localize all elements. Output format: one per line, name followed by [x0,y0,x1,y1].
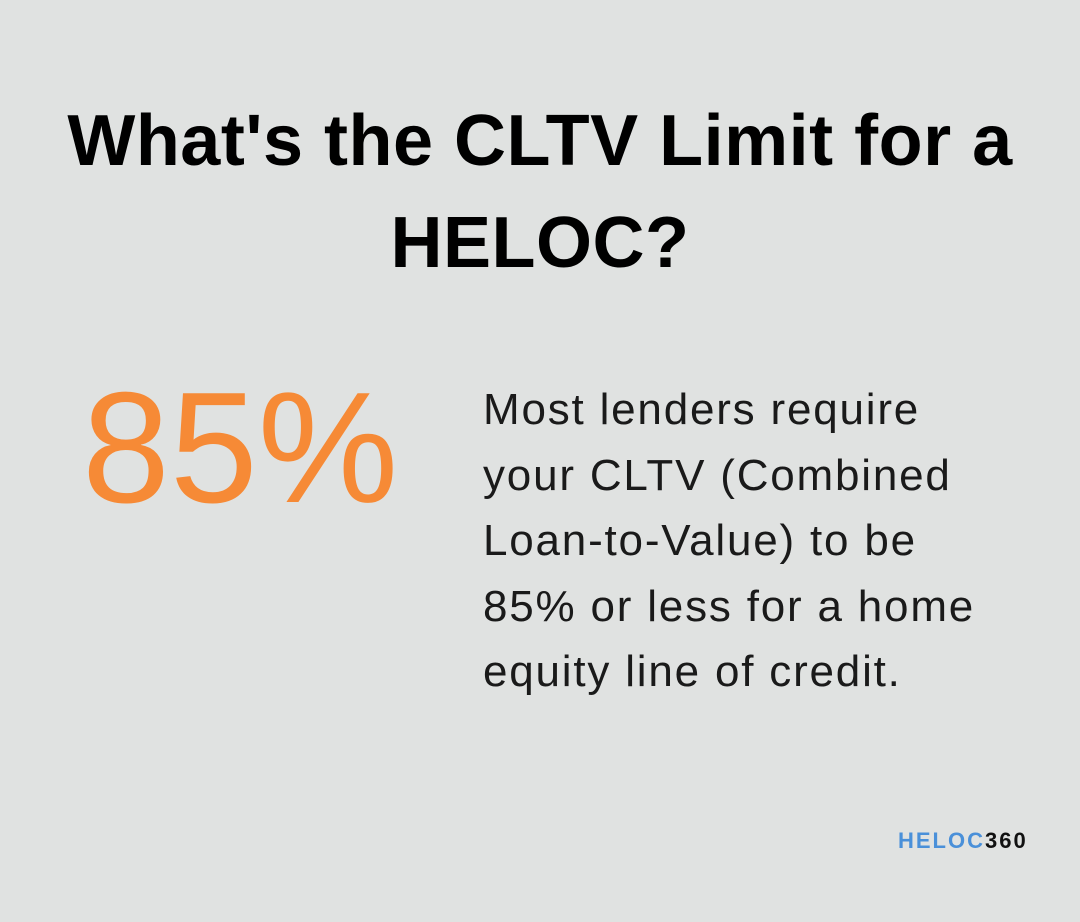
description text: 85% or less for a home [483,582,975,630]
title: What's the CLTV Limit for a [67,101,1013,181]
title: HELOC? [390,203,689,283]
big stat: 85%: 85% [82,360,398,536]
description text: Most lenders require [483,385,920,434]
description text [483,385,975,696]
description text: your CLTV (Combined [483,450,952,500]
description text: Loan-to-Value) to be [483,516,917,565]
logo: HELOC360: HELOC360 [898,828,1028,853]
description text: equity line of credit. [483,647,902,696]
title [67,101,1013,283]
